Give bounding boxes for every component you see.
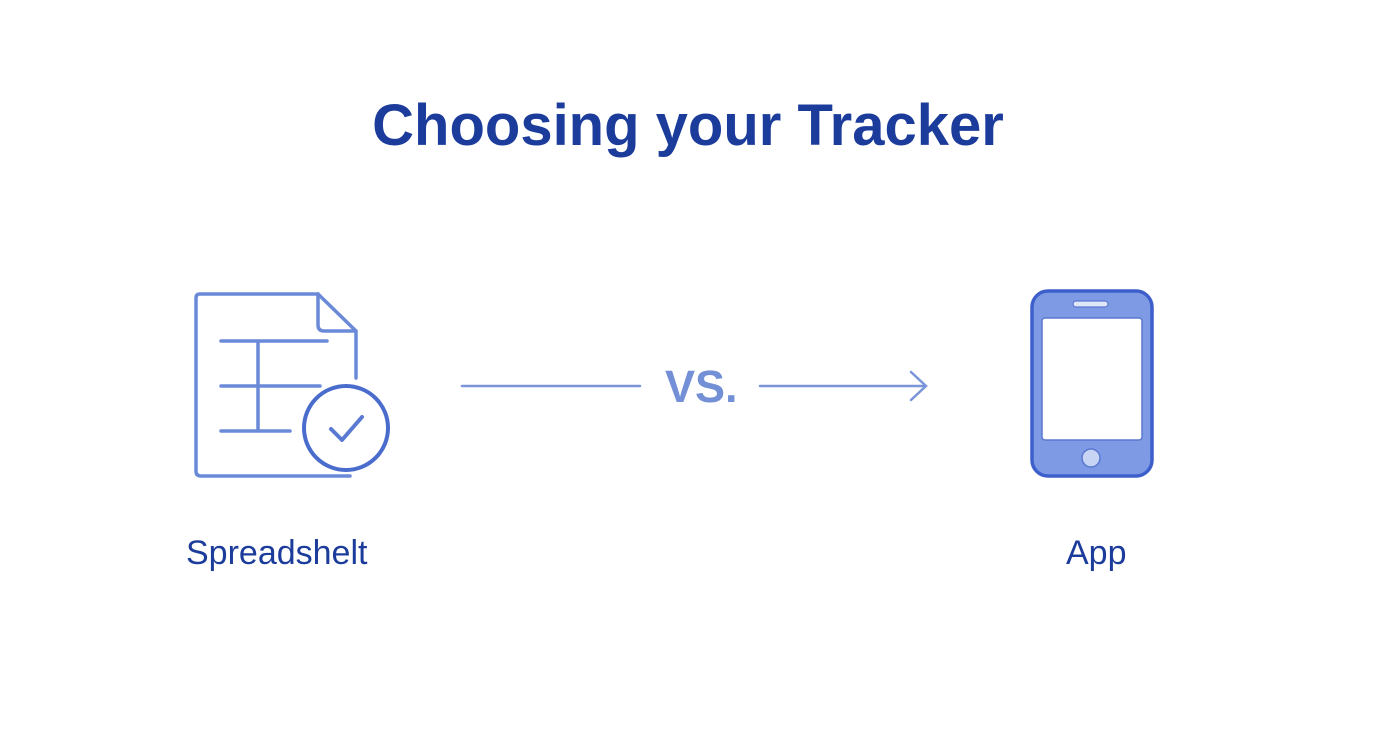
label: app: App xyxy=(1066,534,1126,572)
vs label: VS. xyxy=(665,361,738,412)
label: spreadsheet: Spreadshelt xyxy=(186,534,367,572)
arrow: vs connector xyxy=(462,372,926,400)
title: Choosing your Tracker xyxy=(372,93,1004,158)
icon: phone xyxy=(1032,291,1152,476)
icon: check circle xyxy=(304,386,388,470)
